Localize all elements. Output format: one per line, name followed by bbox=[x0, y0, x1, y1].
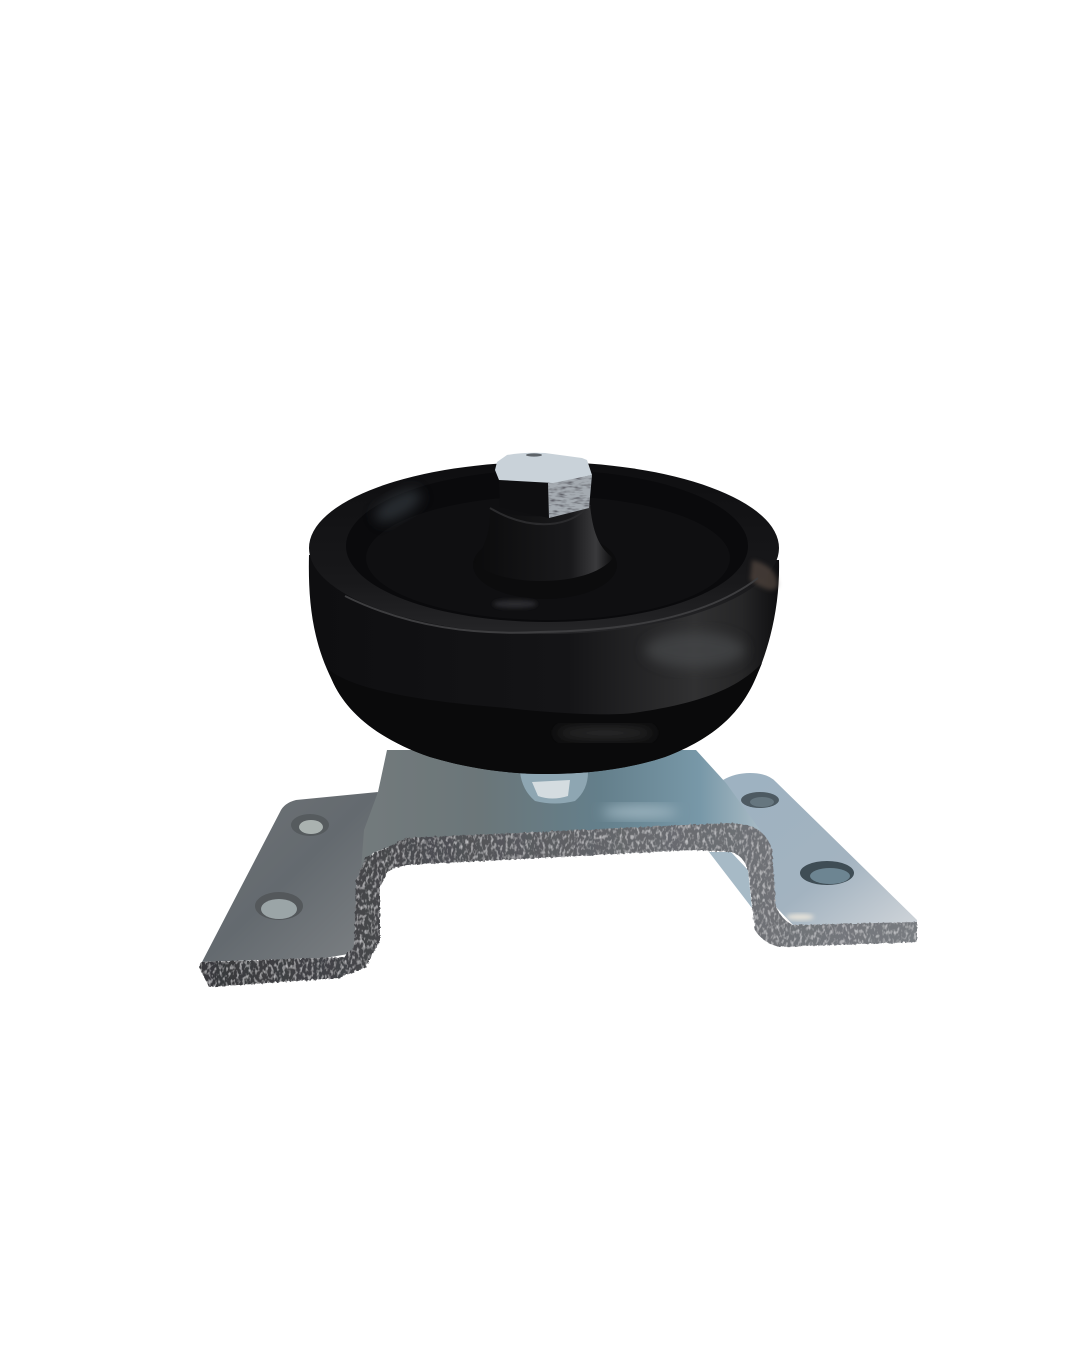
hub base bbox=[473, 531, 617, 599]
right lower hole bbox=[800, 861, 854, 885]
right flange inner side bbox=[709, 852, 752, 908]
bolt top mark bbox=[526, 453, 542, 457]
bolt left face bbox=[499, 480, 549, 518]
dish bbox=[346, 470, 748, 622]
front cut edge bbox=[199, 823, 917, 987]
rim highlight right bbox=[750, 560, 778, 590]
axle nut under wheel bbox=[520, 772, 588, 804]
dish floor bbox=[366, 496, 730, 620]
left lower hole bbox=[255, 892, 303, 920]
tyre body bbox=[309, 555, 779, 774]
rim bbox=[309, 462, 779, 634]
top plate bbox=[361, 750, 760, 870]
left upper hole bbox=[291, 814, 329, 836]
lower band sheen bbox=[555, 727, 655, 739]
right flange reflection bbox=[786, 914, 814, 920]
bolt bbox=[495, 453, 592, 518]
nut shading bbox=[532, 780, 570, 798]
bracket bbox=[199, 750, 917, 987]
dish left sheen bbox=[370, 483, 426, 529]
bolt top face bbox=[495, 453, 592, 483]
wheel bbox=[309, 453, 779, 774]
hub collar bbox=[490, 505, 590, 524]
right upper hole bbox=[741, 792, 779, 808]
tyre sheen bbox=[645, 632, 745, 668]
left mounting flange bbox=[202, 792, 378, 962]
right mounting flange bbox=[723, 773, 917, 925]
hub sheen bbox=[493, 600, 537, 608]
plate highlight bbox=[602, 806, 678, 818]
hub neck bbox=[473, 505, 613, 581]
bolt right face bbox=[548, 475, 592, 518]
rim front lip bbox=[345, 578, 758, 633]
tyre lower darker band bbox=[327, 663, 762, 774]
